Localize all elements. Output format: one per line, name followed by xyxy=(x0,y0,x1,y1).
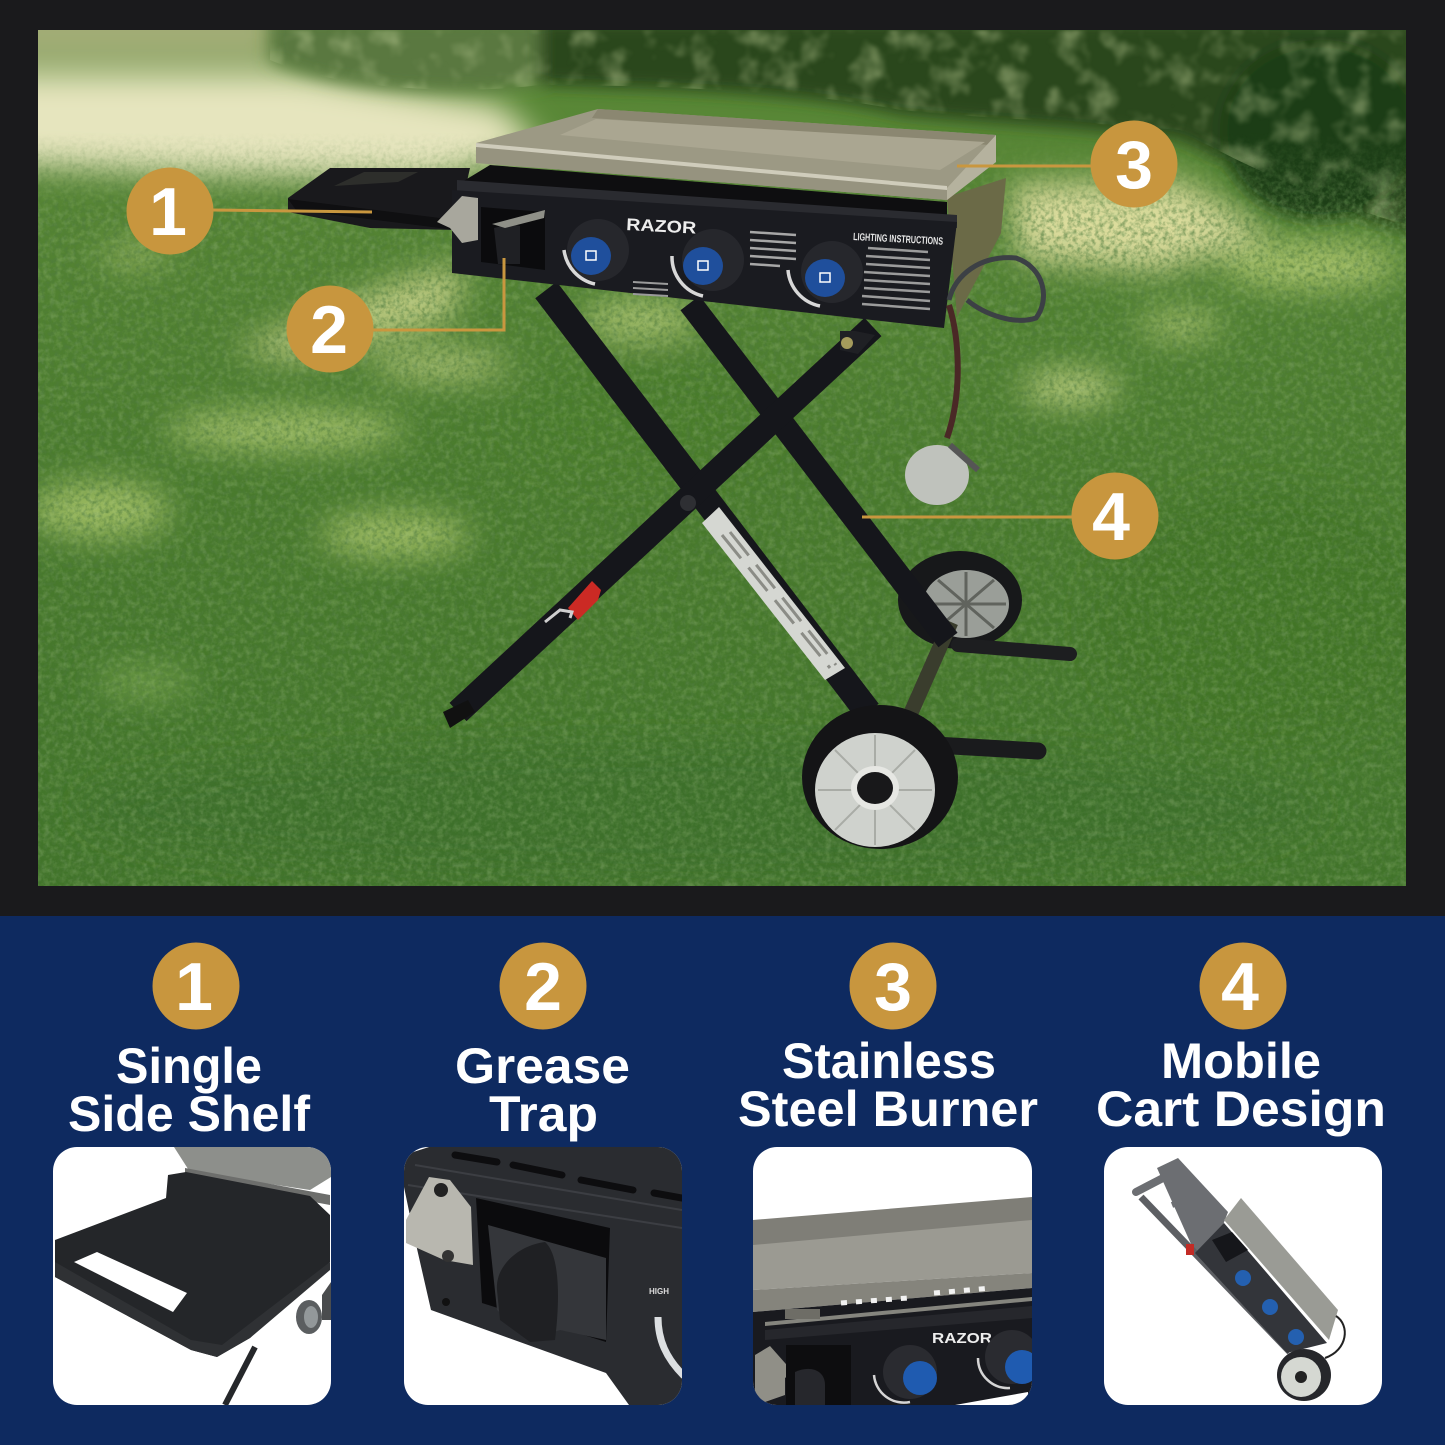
leader line 2 xyxy=(372,258,504,330)
heading: grease trap: Trap xyxy=(489,1086,598,1142)
panel: mobile cart design xyxy=(1096,942,1386,1405)
lighting instructions label: LIGHTING INSTRUCTIONS xyxy=(853,231,943,248)
grass texture xyxy=(38,140,1406,886)
griddle cart xyxy=(288,109,1070,849)
panel: grease trap xyxy=(404,942,684,1405)
icon: grease trap opening xyxy=(481,207,545,270)
shelf xyxy=(288,168,470,230)
brand label: RAZOR xyxy=(626,215,697,238)
photo badge 3 xyxy=(1090,120,1178,208)
hedge foliage texture xyxy=(270,30,1406,222)
badge 1 xyxy=(152,942,240,1030)
icon: control knob 1 xyxy=(567,219,629,281)
badge 2: 2 xyxy=(524,949,562,1025)
gas hose and regulator xyxy=(905,258,1044,505)
heading: stainless steel burner: Stainless xyxy=(782,1033,996,1089)
photo badge 1 xyxy=(126,168,214,254)
photo: grease trap xyxy=(404,1147,684,1405)
photo: side shelf xyxy=(53,1147,331,1405)
icon: front wheel xyxy=(802,705,958,849)
hero photo: griddle on lawn xyxy=(0,0,1430,886)
heading: single side shelf: Single xyxy=(116,1038,262,1094)
lighting instructions label xyxy=(633,231,943,309)
hedge xyxy=(270,20,1420,235)
heading: single side shelf: Side Shelf xyxy=(68,1086,310,1142)
leader line 1 xyxy=(212,210,372,212)
photo: griddle burner xyxy=(753,1147,1039,1405)
red latch xyxy=(568,581,601,620)
lawn xyxy=(0,0,1430,886)
rear axle and handles xyxy=(958,645,1070,654)
top rail xyxy=(457,180,957,228)
control panel xyxy=(452,190,957,328)
photo badge 2: 2 xyxy=(310,292,348,368)
leader line 4 xyxy=(862,516,1074,518)
badge 3 xyxy=(850,942,936,1030)
badge 1: 1 xyxy=(175,949,213,1025)
warning label xyxy=(702,507,845,680)
navy lower panel background xyxy=(0,916,1445,1445)
photo badge 3: 3 xyxy=(1115,127,1153,203)
photo badge 1: 1 xyxy=(149,174,187,250)
hinge xyxy=(437,196,478,243)
heading: grease trap: Grease xyxy=(455,1038,630,1094)
heading: mobile cart design xyxy=(1096,1033,1386,1137)
leader line 3 xyxy=(957,164,1092,168)
badge 4: 4 xyxy=(1221,949,1259,1025)
panel: single side shelf xyxy=(53,942,331,1405)
heading: single side shelf xyxy=(68,1038,310,1142)
photo: griddle burner: RAZOR xyxy=(932,1330,992,1347)
badge 2 xyxy=(500,942,586,1030)
icon: control knob 2 xyxy=(682,229,744,291)
badge 3: 3 xyxy=(874,949,912,1025)
photo: grease trap: HIGH xyxy=(649,1287,669,1296)
heading: mobile cart design: Cart Design xyxy=(1096,1081,1386,1137)
gap under plate xyxy=(465,165,947,214)
panel: stainless steel burner xyxy=(738,942,1039,1405)
badge 4 xyxy=(1200,942,1286,1030)
icon: rear wheel xyxy=(898,551,1022,649)
heading: stainless steel burner: Steel Burner xyxy=(738,1081,1038,1137)
dark upper background xyxy=(0,0,1445,916)
photo badge 4: 4 xyxy=(1092,479,1130,555)
burner body side xyxy=(947,178,1006,317)
photo badge 2 xyxy=(286,286,374,372)
photo badge 4 xyxy=(1072,472,1158,560)
heading: grease trap xyxy=(455,1038,630,1142)
heading: stainless steel burner xyxy=(738,1033,1038,1137)
photo: folded cart xyxy=(1104,1147,1382,1405)
folding X legs xyxy=(690,303,948,640)
heading: mobile cart design: Mobile xyxy=(1161,1033,1321,1089)
icon: control knob 3 xyxy=(801,241,863,303)
griddle plate xyxy=(476,109,996,200)
